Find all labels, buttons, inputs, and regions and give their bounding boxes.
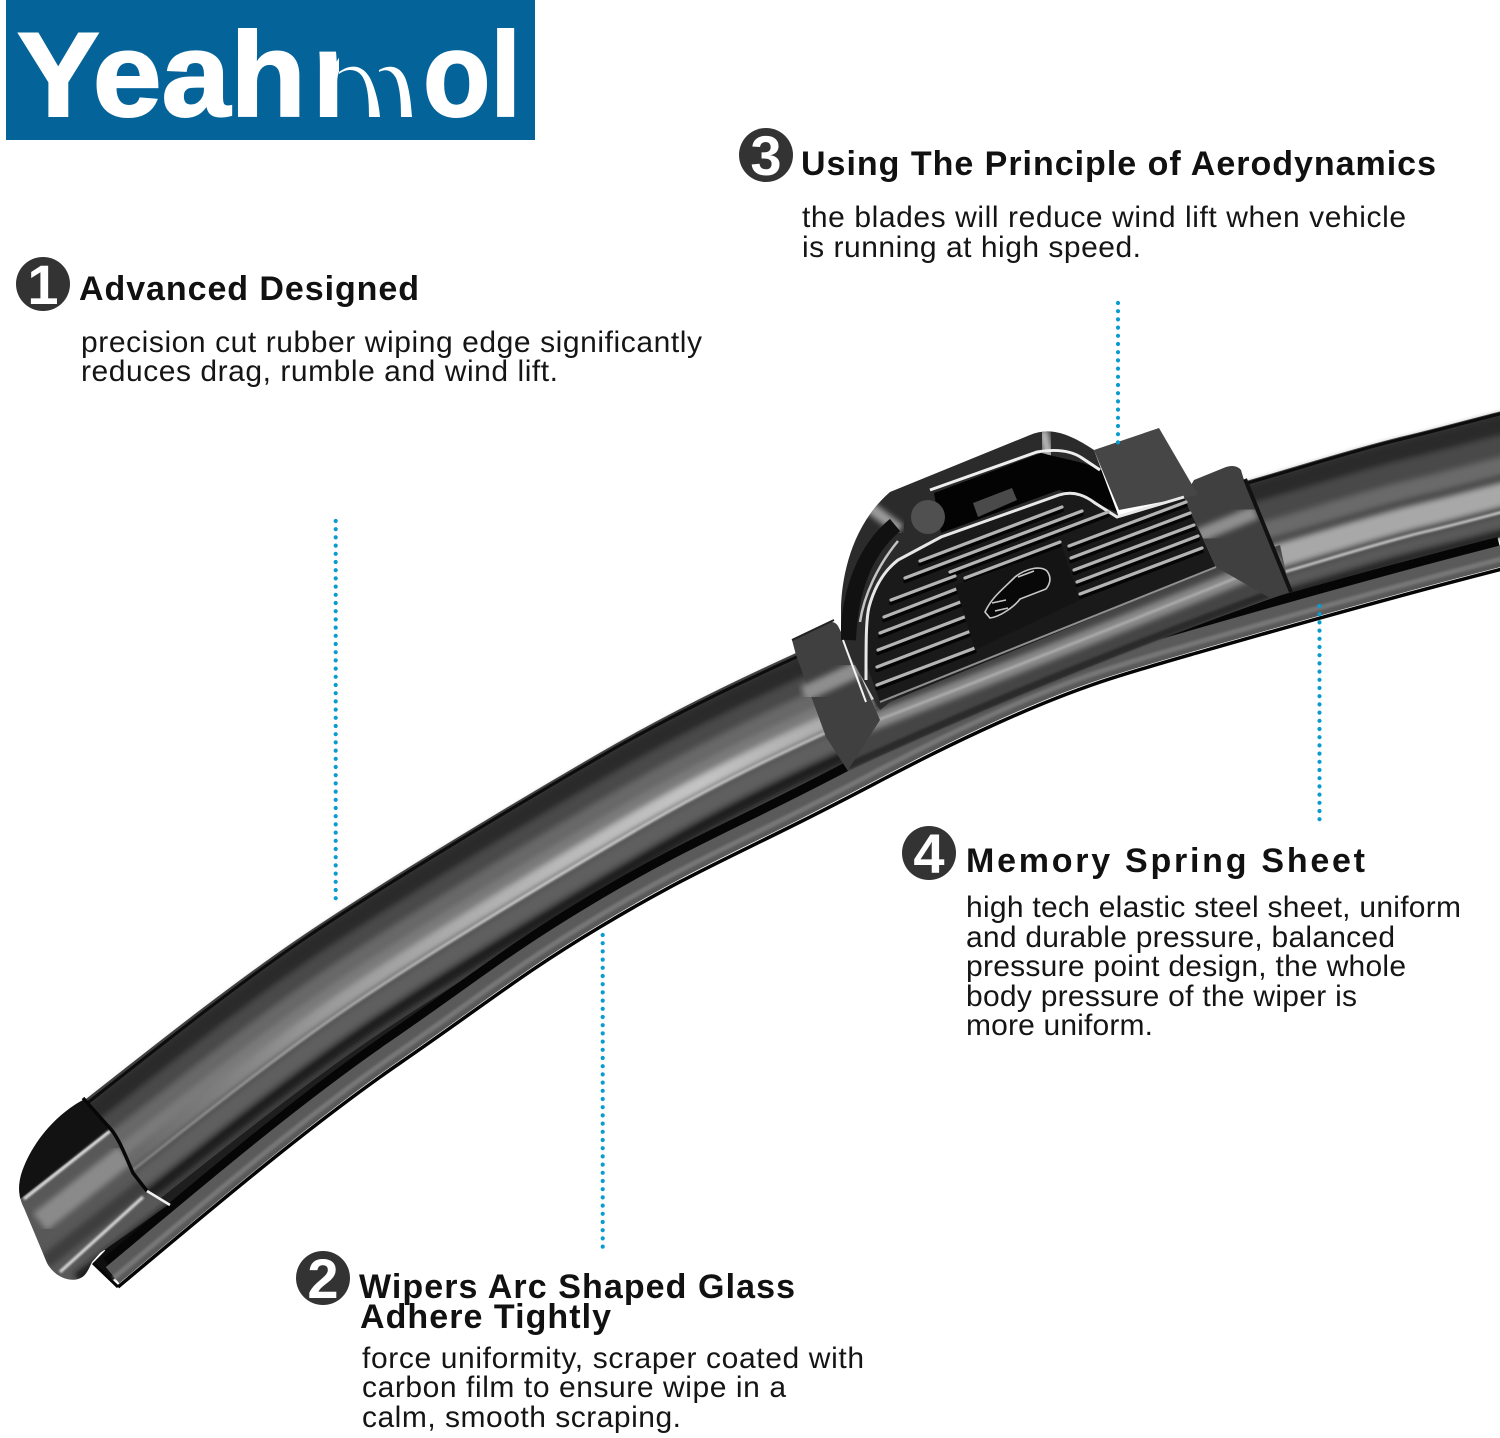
text block 4: high tech elastic steel sheet, uniform bbox=[966, 891, 1461, 924]
logo: Yeahmol bbox=[6, 0, 535, 142]
clamp hood bbox=[841, 430, 1120, 710]
text block 4: more uniform. bbox=[966, 1009, 1153, 1042]
badge 4 bbox=[902, 822, 956, 885]
badge 2: 2 bbox=[307, 1247, 339, 1310]
badge 4: 4 bbox=[913, 822, 945, 885]
wiper blade illustration bbox=[10, 411, 1500, 1287]
logo: Yeahmol: m bbox=[313, 8, 413, 142]
logo: Yeahmol: ol bbox=[423, 8, 521, 142]
text block 4: and durable pressure, balanced bbox=[966, 921, 1395, 954]
heading 1: Advanced Designed bbox=[79, 270, 419, 308]
text block 4 bbox=[966, 891, 1461, 1042]
clamp adapter bbox=[792, 428, 1291, 771]
heading 2 bbox=[359, 1268, 795, 1336]
text block 3: the blades will reduce wind lift when vehicle bbox=[802, 201, 1406, 234]
text block 4: body pressure of the wiper is bbox=[966, 980, 1357, 1013]
heading 2: Adhere Tightly bbox=[360, 1298, 611, 1336]
heading 4: Memory Spring Sheet bbox=[966, 842, 1365, 880]
text block 1: precision cut rubber wiping edge significantly bbox=[81, 326, 702, 359]
end cap bbox=[19, 1096, 171, 1280]
text block 2: force uniformity, scraper coated with bbox=[362, 1342, 864, 1375]
text block 4: pressure point design, the whole bbox=[966, 950, 1406, 983]
right blade section bbox=[1225, 411, 1500, 601]
text block 2: carbon film to ensure wipe in a bbox=[362, 1371, 786, 1404]
text block 3 bbox=[802, 201, 1406, 264]
text block 1: reduces drag, rumble and wind lift. bbox=[81, 355, 558, 388]
right sleeve bbox=[1184, 466, 1291, 598]
left sleeve bbox=[792, 620, 880, 770]
rubber tip bbox=[93, 1205, 175, 1280]
badge 3: 3 bbox=[750, 124, 782, 187]
text block 1 bbox=[81, 326, 702, 388]
icon: car emblem bbox=[985, 568, 1050, 618]
heading 3: Using The Principle of Aerodynamics bbox=[801, 145, 1436, 183]
callout 2: Wipers Arc Shaped Glass bbox=[296, 1247, 864, 1434]
heading 2: Wipers Arc Shaped Glass bbox=[359, 1268, 795, 1306]
blade underfill bbox=[97, 521, 1489, 1241]
callout 1: Advanced Designed bbox=[16, 253, 702, 388]
left blade section bbox=[86, 639, 893, 1199]
callout 4: Memory Spring Sheet bbox=[902, 822, 1461, 1042]
rubber strip bbox=[93, 542, 1500, 1287]
clamp base tube bbox=[826, 545, 1290, 771]
dotted leader lines bbox=[336, 303, 1320, 1248]
badge 1: 1 bbox=[27, 253, 59, 316]
ribbed plate bbox=[866, 493, 1216, 702]
text block 3: is running at high speed. bbox=[802, 231, 1141, 264]
badge 3 bbox=[739, 124, 793, 187]
logo: Yeahmol: Yeah bbox=[17, 8, 306, 142]
text block 2 bbox=[362, 1342, 864, 1434]
clamp block bbox=[1094, 428, 1198, 510]
badge 2 bbox=[296, 1247, 350, 1310]
text block 2: calm, smooth scraping. bbox=[362, 1401, 681, 1434]
callout 3: Using The Principle of Aerodynamics bbox=[739, 124, 1436, 264]
badge 1 bbox=[16, 253, 70, 316]
